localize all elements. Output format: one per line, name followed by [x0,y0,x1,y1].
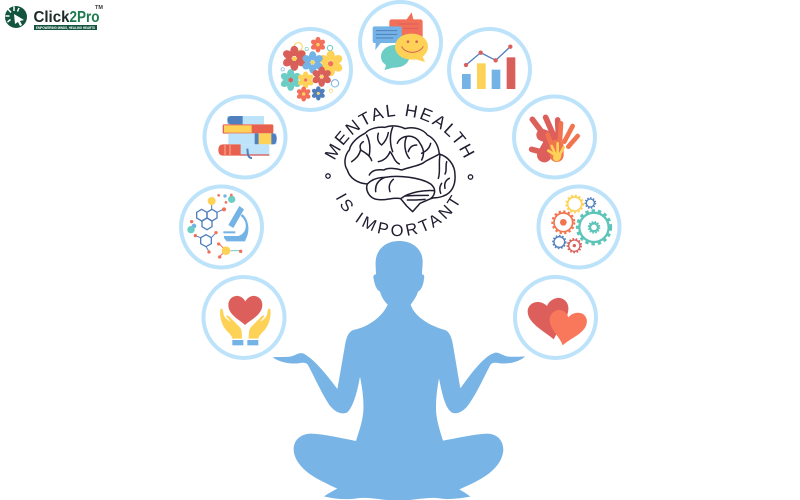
logo: Click2Pro: 2Pro [70,9,100,26]
icon: hands holding heart [204,277,284,358]
logo: Click2Pro: TM [95,5,103,11]
icon: stack of books [204,96,286,178]
decorative dot right [468,175,473,179]
heading: IS IMPORTANT: IS IMPORTANT [336,193,459,236]
brain illustration [345,126,455,212]
logo: Click2Pro: Click [34,9,70,26]
heading: MENTAL HEALTH: MENTAL HEALTH [324,104,474,160]
icon: two hearts [515,277,596,358]
icon: overlapping hands [514,96,595,178]
decorative dot left [326,174,330,178]
logo: Click2Pro: EMPOWERING MINDS, HEALING HEARTS [36,26,95,30]
icon: chat bubbles [360,2,441,83]
icon: bar and line chart [449,29,530,110]
icon: flowers [270,29,351,110]
icon: molecules and microscope [181,186,262,268]
logo: Click2Pro [5,5,103,30]
meditating figure silhouette [273,241,525,500]
icon: gears [538,186,620,268]
